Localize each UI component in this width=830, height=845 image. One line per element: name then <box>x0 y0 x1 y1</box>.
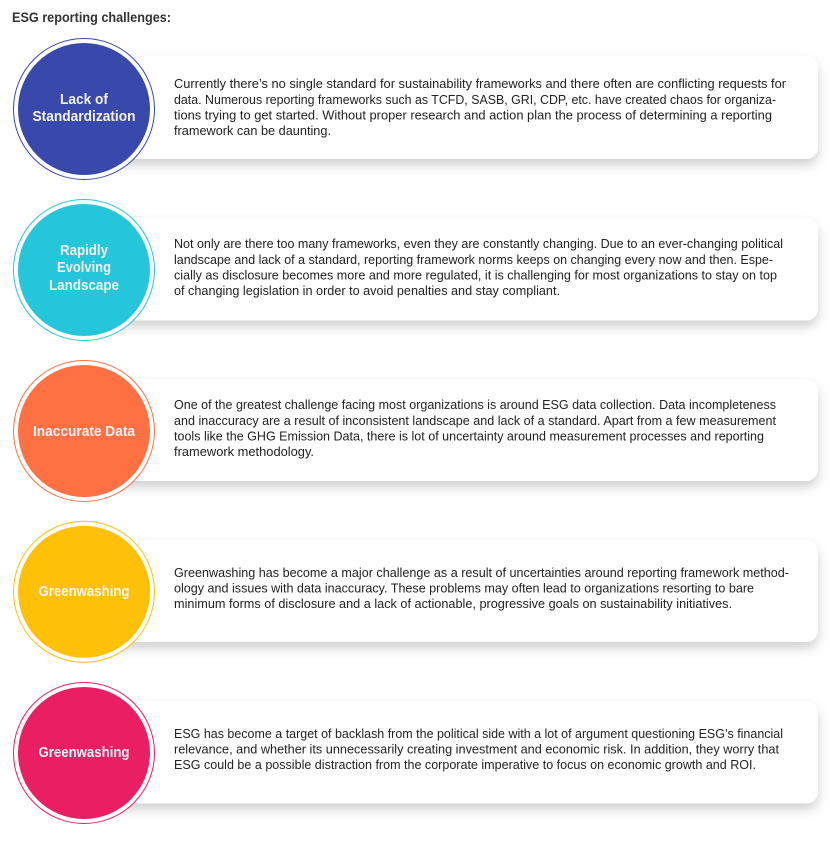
body text: tions trying to get started. Without proper research and action plan the process of determining a reporting <box>174 108 772 122</box>
body text: ology and issues with data inaccuracy. These problems may often lead to organizations resorting to bare <box>174 580 754 596</box>
panel: rapidly evolving landscape <box>14 200 818 340</box>
body text: Greenwashing has become a major challenge as a result of uncertainties around reporting framework method- <box>174 565 789 580</box>
body text: relevance, and whether its unnecessarily creating investment and economic risk. In addition, they worry that <box>174 742 779 756</box>
body text <box>174 236 783 298</box>
circle label: Rapidly <box>60 243 108 259</box>
panel: greenwashing amber <box>14 521 818 662</box>
circle label: Inaccurate Data <box>33 424 136 440</box>
body text <box>174 565 789 611</box>
circle label <box>49 243 119 294</box>
body text: and inaccuracy are a result of inconsistent landscape and lack of a standard. Apart from a few measurement <box>174 413 776 428</box>
body text: landscape and lack of a standard, reporting framework norms keeps on changing every now and then. Espe- <box>174 252 773 267</box>
body text: ESG has become a target of backlash from the political side with a lot of argument questioning ESG’s financial <box>174 726 783 741</box>
circle badge <box>14 360 154 502</box>
circle label <box>32 92 136 125</box>
circle badge <box>14 682 154 824</box>
body text <box>174 726 783 772</box>
circle label: Evolving <box>57 260 111 276</box>
body text <box>174 397 776 459</box>
panel: greenwashing pink <box>14 682 818 824</box>
card background <box>100 540 818 642</box>
body text: cially as disclosure becomes more and more regulated, it is challenging for most organizations to stay on top <box>174 268 777 282</box>
circle label: Standardization <box>32 109 136 125</box>
circle badge <box>14 521 154 662</box>
body text: framework methodology. <box>174 444 314 459</box>
body text: framework can be daunting. <box>174 123 331 138</box>
circle label: Greenwashing <box>38 584 130 600</box>
card background <box>100 56 818 159</box>
title: ESG reporting challenges: <box>12 9 171 25</box>
body text: Not only are there too many frameworks, even they are constantly changing. Due to an ever-changing political <box>174 236 783 251</box>
card background <box>100 218 818 320</box>
body text: tools like the GHG Emission Data, there is lot of uncertainty around measurement processes and reporting <box>174 428 764 444</box>
body text: data. Numerous reporting frameworks such as TCFD, SASB, GRI, CDP, etc. have created chaos for organiza- <box>174 92 776 107</box>
body text: of changing legislation in order to avoid penalties and stay compliant. <box>174 283 560 298</box>
panel: lack of standardization <box>14 38 818 180</box>
body text: ESG could be a possible distraction from the corporate imperative to focus on economic growth and ROI. <box>174 757 756 772</box>
body text: minimum forms of disclosure and a lack of actionable, progressive goals on sustainability initiatives. <box>174 596 732 611</box>
circle label: Greenwashing <box>38 745 130 761</box>
circle badge <box>14 200 154 340</box>
circle label: Landscape <box>49 278 119 294</box>
body text <box>174 76 787 138</box>
body text: One of the greatest challenge facing most organizations is around ESG data collection. Data incompleteness <box>174 397 776 412</box>
card background <box>100 379 818 481</box>
circle badge <box>14 38 154 180</box>
card background <box>100 701 818 804</box>
panel: inaccurate data <box>14 360 818 502</box>
circle label: Lack of <box>60 92 108 108</box>
body text: Currently there’s no single standard for sustainability frameworks and there often are conflicting requests for <box>174 76 787 91</box>
